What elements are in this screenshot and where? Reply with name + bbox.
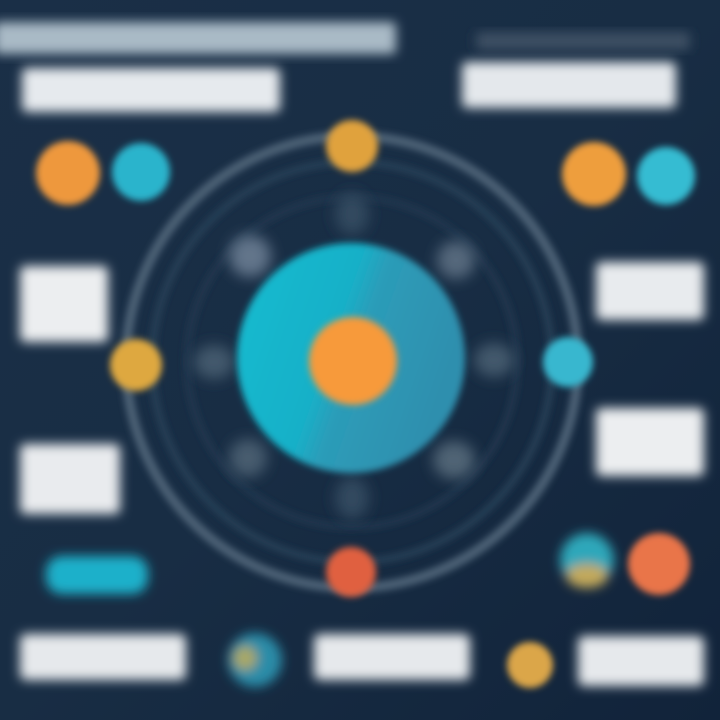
text box: right lower <box>596 408 704 476</box>
text box: bottom right <box>578 636 704 686</box>
node: left yellow <box>110 339 162 391</box>
icon: lower right teal and yellow circle <box>560 533 614 588</box>
header bar: top right title <box>476 32 690 50</box>
node: bottom red <box>326 547 376 597</box>
text box: left lower <box>20 444 120 514</box>
icon: top right teal circle <box>637 147 695 205</box>
text box: left upper <box>20 266 108 342</box>
concentric ring diagram <box>110 120 593 597</box>
text box: bottom left <box>20 634 186 680</box>
icon: lower right red-orange circle <box>628 533 690 595</box>
icon: top left orange circle <box>36 141 100 205</box>
icon: bottom teal and yellow circle <box>228 633 282 687</box>
header bar: top left subtitle <box>22 68 280 112</box>
node: top yellow <box>326 120 378 172</box>
header bar: top right subtitle <box>462 62 676 108</box>
outer rings <box>126 136 578 588</box>
central orange core <box>309 317 397 405</box>
header bar: top left title <box>0 22 396 54</box>
icon: top right orange circle <box>562 142 626 206</box>
icon: top left teal circle <box>112 143 170 201</box>
spoke nodes <box>194 193 514 519</box>
central teal disc <box>237 243 465 473</box>
node: right teal <box>543 337 593 387</box>
text box: right upper <box>596 262 704 320</box>
icon: bottom yellow circle <box>507 642 553 688</box>
text box: bottom center <box>314 634 470 680</box>
pill: teal label <box>46 556 148 594</box>
